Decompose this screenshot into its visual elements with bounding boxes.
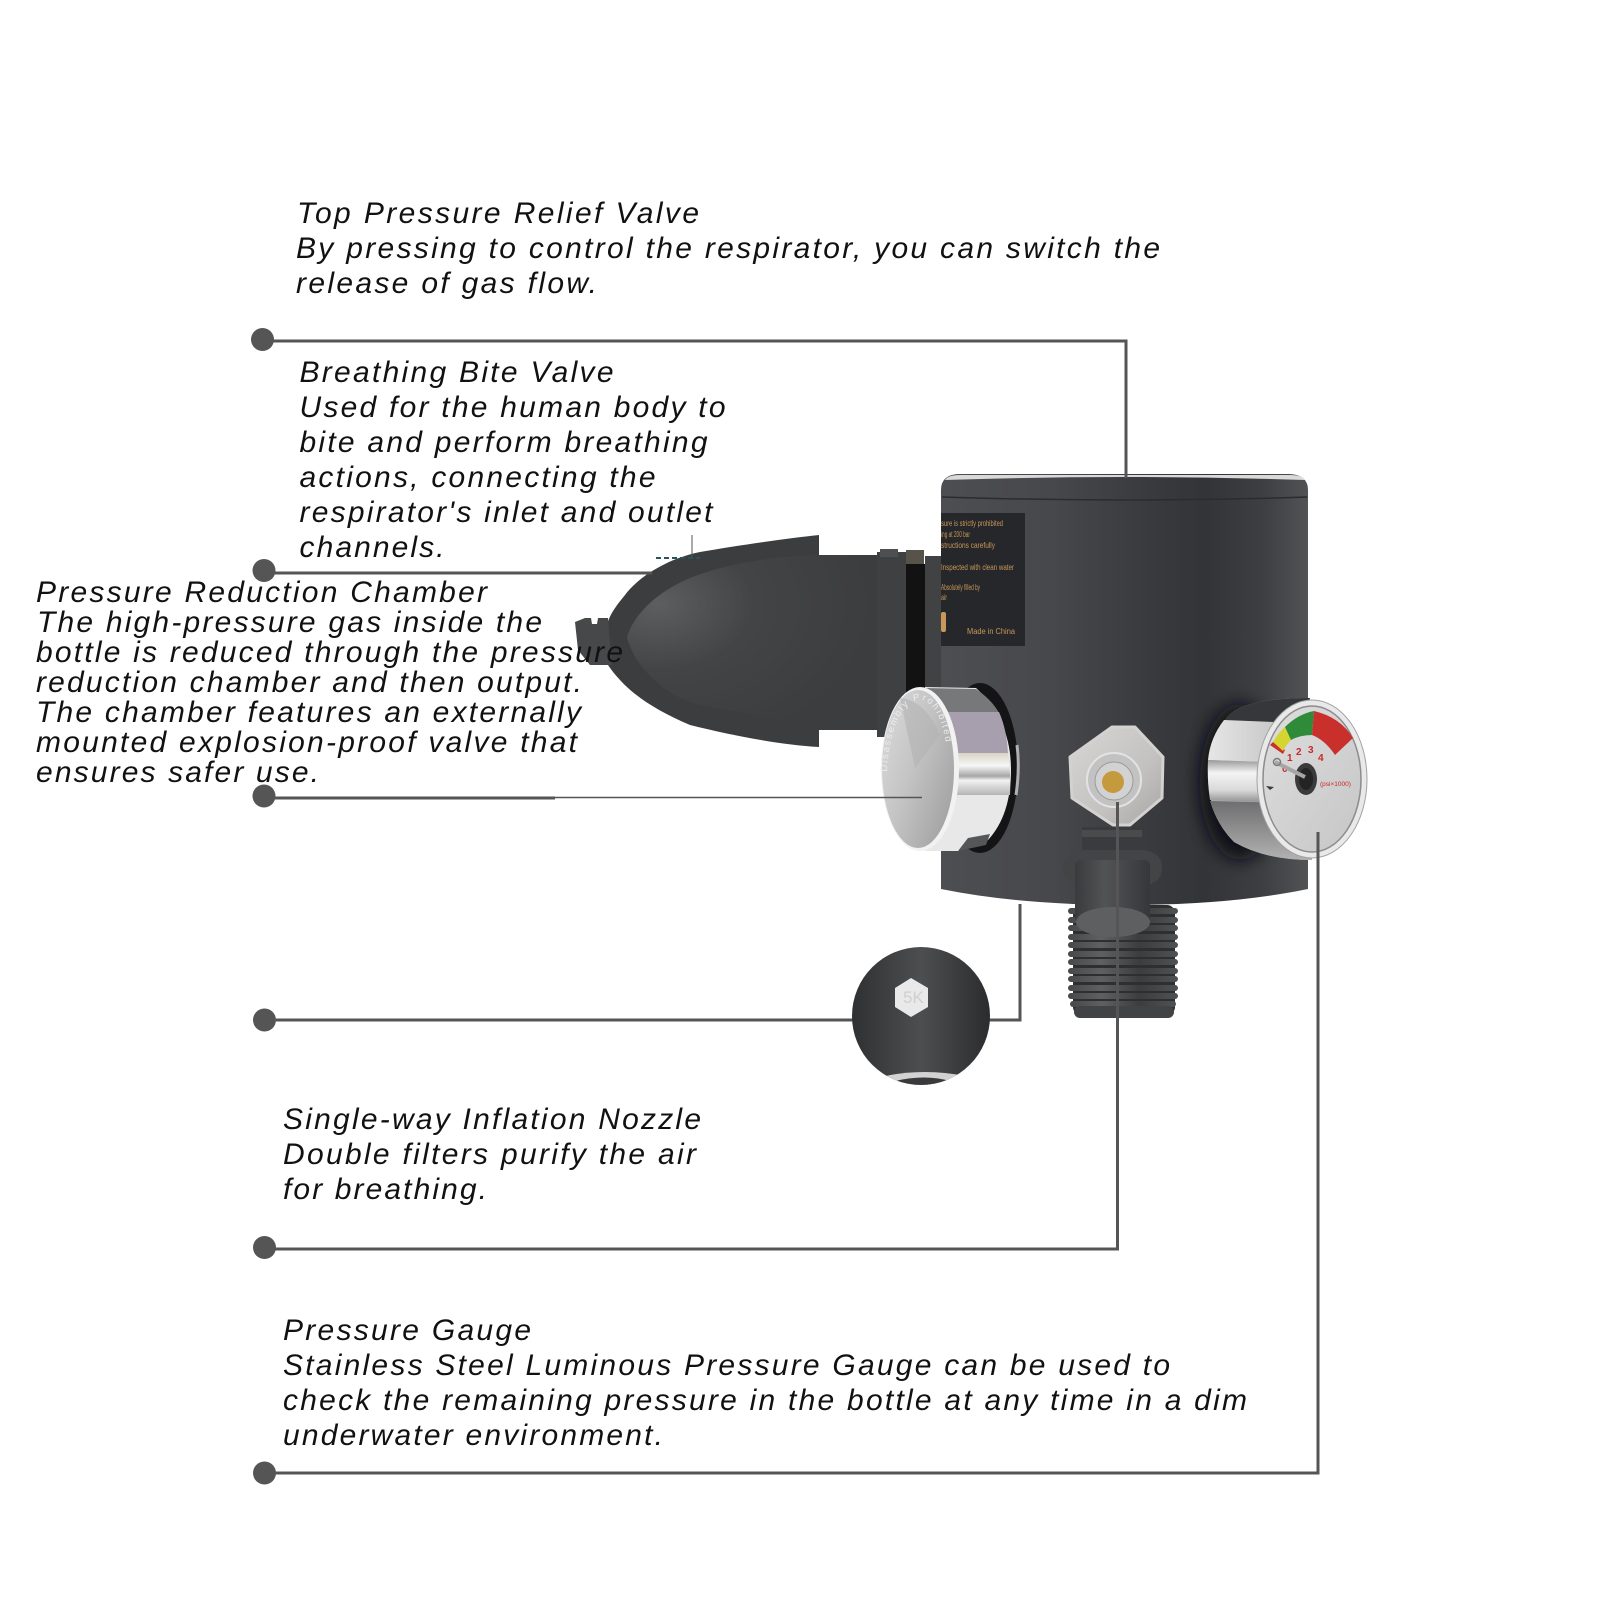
text block 6 <box>283 1314 1247 1452</box>
marker dot 2 <box>252 559 276 582</box>
text block 6: Pressure Gauge <box>283 1314 531 1347</box>
gauge hub and needle <box>1266 758 1317 795</box>
warning label: Made in China <box>967 627 1016 636</box>
gauge colour bands <box>1270 711 1353 755</box>
leader 2 <box>270 572 652 574</box>
text block 3: bottle is reduced through the pressure <box>36 636 623 669</box>
artifact specks near leader <box>656 535 700 558</box>
callout: breathing bite valve <box>252 356 726 582</box>
marker dot 4 <box>253 1008 276 1032</box>
text block 2: Breathing Bite Valve <box>300 356 614 389</box>
warning label: sure is strictly prohibited <box>941 519 1003 528</box>
callout: pressure reduction chamber <box>36 576 922 808</box>
warning label: ing at 200 bar <box>941 530 970 539</box>
text block 2: actions, connecting the <box>300 461 656 494</box>
leader: inset to body <box>276 904 1020 1020</box>
inset: safety bolt detail <box>276 904 1020 1090</box>
warning label: Absolutely filled by <box>941 583 980 592</box>
warning label: structions carefully <box>941 541 995 550</box>
text block 2: channels. <box>300 531 444 564</box>
text block 1 <box>296 197 1160 300</box>
leader 1 <box>270 341 1126 478</box>
knob chrome facets <box>925 687 1011 851</box>
gauge hex body <box>1208 698 1312 860</box>
marker dot 1 <box>251 328 274 351</box>
product: respirator valve <box>575 474 1368 1018</box>
text block 3: The high-pressure gas inside the <box>37 606 542 639</box>
cylinder body <box>941 474 1308 905</box>
connector rings <box>877 549 943 737</box>
text block 6: Stainless Steel Luminous Pressure Gauge can be used to <box>283 1349 1170 1382</box>
callout: single-way inflation nozzle <box>253 802 1118 1259</box>
marker dot 5 <box>253 1236 276 1259</box>
knob: pressure reduction chamber: Disassembly Prohibited <box>880 694 952 771</box>
text block 5: Double filters purify the air <box>283 1138 697 1171</box>
text block 2: respirator's inlet and outlet <box>300 496 714 529</box>
text block 1: Top Pressure Relief Valve <box>297 197 699 230</box>
gauge numbers: 0 <box>1282 764 1288 775</box>
text block 2 <box>300 356 726 564</box>
leader 6 <box>270 832 1318 1473</box>
threaded stem <box>1068 905 1178 1018</box>
text block 5: for breathing. <box>283 1173 487 1206</box>
gauge numbers: 1 <box>1287 753 1293 764</box>
text block 3: Pressure Reduction Chamber <box>36 576 488 609</box>
text block 2: bite and perform breathing <box>300 426 708 459</box>
text block 3: The chamber features an externally <box>36 696 583 729</box>
pressure gauge <box>1200 698 1367 860</box>
gauge numbers <box>1282 745 1351 788</box>
text block 6: underwater environment. <box>283 1419 663 1452</box>
gauge numbers: 3 <box>1308 745 1314 756</box>
warning label <box>941 513 1025 646</box>
gauge numbers: (psi×1000) <box>1320 781 1351 788</box>
leader 3 <box>270 796 922 800</box>
leader 5 <box>270 802 1118 1249</box>
warning label: Inspected with clean water <box>941 563 1014 572</box>
text block 3: mounted explosion-proof valve that <box>36 726 579 759</box>
text block 6: check the remaining pressure in the bottle at any time in a dim <box>283 1384 1247 1417</box>
marker dot 3 <box>252 784 276 808</box>
text block 3: reduction chamber and then output. <box>36 666 582 699</box>
inflation nozzle <box>1063 827 1162 937</box>
gauge numbers: 2 <box>1296 747 1302 758</box>
text block 3: ensures safer use. <box>36 756 319 789</box>
warning label: air <box>941 593 947 602</box>
text block 5 <box>283 1103 701 1206</box>
text block 2: Used for the human body to <box>300 391 726 424</box>
text block 3 <box>36 576 623 789</box>
inset: safety bolt detail: 5K <box>903 988 924 1007</box>
marker dot 6 <box>253 1462 276 1484</box>
breathing bite valve mouthpiece <box>575 535 880 747</box>
text block 1: By pressing to control the respirator, you can switch the <box>296 232 1160 265</box>
inflation valve fitting <box>1070 727 1163 825</box>
text block 1: release of gas flow. <box>296 267 597 300</box>
callout: top pressure relief valve <box>251 197 1160 478</box>
gauge numbers: 4 <box>1318 753 1324 764</box>
text block 5: Single-way Inflation Nozzle <box>283 1103 701 1136</box>
callout: pressure gauge <box>253 832 1318 1484</box>
knob: pressure reduction chamber <box>880 683 1020 853</box>
